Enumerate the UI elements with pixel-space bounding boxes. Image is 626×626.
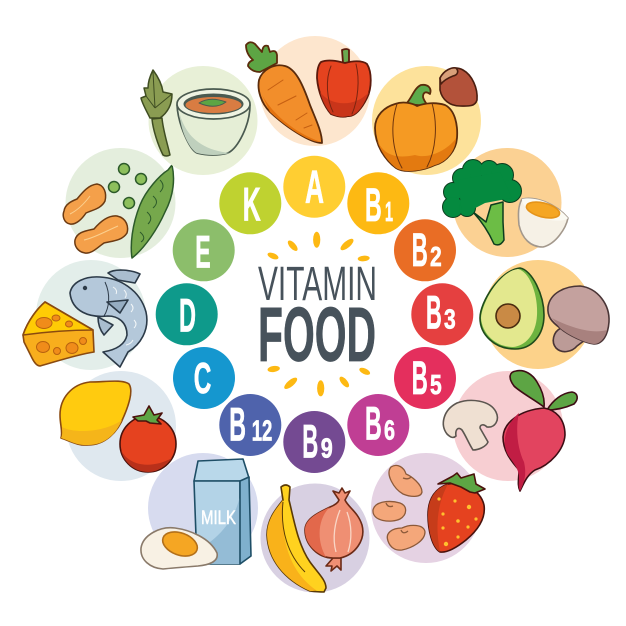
icon: hazelnut — [440, 68, 477, 106]
icon: boiled egg — [518, 198, 568, 247]
icon: tomato — [120, 406, 176, 472]
vitamin circle: B3 — [411, 283, 473, 345]
icon: soup bowl — [177, 89, 250, 155]
vitamin circle: K: K — [243, 178, 261, 231]
title: VITAMIN: VITAMIN — [258, 258, 377, 311]
food group: banana and onion — [260, 484, 370, 592]
food group: peanuts and peas — [63, 148, 176, 258]
food group: avocado and mushroom — [480, 260, 609, 369]
vitamin circle: A: A — [305, 161, 324, 213]
vitamin circle: C — [173, 347, 235, 409]
icon: mushroom brown — [548, 286, 609, 352]
food group: carrot and pepper — [246, 36, 371, 146]
icon: red pepper — [317, 49, 371, 117]
icon: beans — [373, 465, 425, 550]
icon: lemon — [60, 381, 131, 445]
vitamin circle: B6: B — [365, 396, 382, 449]
icon: banana — [267, 485, 326, 592]
vitamin circle: C: C — [194, 354, 211, 403]
icon: broccoli — [443, 160, 521, 245]
food group: lemon and tomato — [60, 371, 176, 481]
icon: green peas — [108, 164, 174, 258]
vitamin circle: B9: 9 — [321, 433, 333, 464]
icon: white mushroom — [443, 400, 497, 450]
vitamin circle: B5: B — [412, 351, 428, 404]
food group: pumpkin and hazelnut — [372, 66, 481, 175]
icon: avocado — [480, 268, 544, 349]
food group: asparagus and soup bowl — [141, 66, 258, 175]
icon: pumpkin — [375, 85, 457, 171]
vitamin circle: B1: B — [365, 178, 382, 231]
food group: broccoli and boiled egg — [443, 148, 568, 257]
vitamin circle: B3: B — [426, 285, 442, 338]
icon: cheese — [23, 302, 94, 366]
sun rays around title — [267, 232, 371, 396]
icon: fish — [70, 270, 147, 367]
vitamin circle: D — [156, 283, 218, 345]
vitamin circle: B1 — [347, 172, 409, 234]
icon: onion — [305, 488, 363, 571]
vitamin circle: B5 — [394, 347, 456, 409]
icon: fried egg — [141, 528, 217, 569]
vitamin circle: B3: 3 — [444, 303, 456, 334]
vitamin circle: B6: 6 — [384, 414, 395, 445]
vitamin circle: B12: 12 — [252, 416, 272, 448]
vitamin circle: B2: B — [412, 223, 428, 276]
vitamin circle: B12 — [219, 394, 281, 456]
icon: peanuts — [63, 184, 128, 253]
food group: beans and strawberry — [371, 453, 485, 563]
vitamin circle: B5: 5 — [430, 369, 442, 400]
vitamin circle: B2 — [394, 219, 456, 281]
vitamin circle: B2: 2 — [430, 241, 442, 272]
icon: strawberry — [428, 473, 485, 552]
icon: radish — [503, 371, 577, 491]
label: MILK: MILK — [201, 508, 236, 529]
vitamin circle: A — [283, 156, 345, 218]
vitamin circle: D: D — [179, 289, 196, 342]
vitamin circle: K — [219, 172, 281, 234]
vitamin circle: B1: 1 — [385, 196, 393, 227]
food group: white mushroom and radish — [443, 371, 577, 491]
vitamin circle: B6 — [347, 394, 409, 456]
vitamin circle: B9: B — [302, 415, 318, 468]
icon: carrot — [246, 42, 322, 143]
title: FOOD: FOOD — [258, 292, 376, 378]
icon: asparagus — [141, 70, 172, 156]
vitamin circle: E: E — [195, 226, 211, 277]
vitamin circle: B12: B — [229, 398, 246, 451]
food group: milk and fried egg — [141, 453, 258, 569]
vitamin circle: E — [173, 219, 235, 281]
vitamin circle: B9 — [283, 411, 345, 473]
food group: fish and cheese — [23, 260, 147, 370]
